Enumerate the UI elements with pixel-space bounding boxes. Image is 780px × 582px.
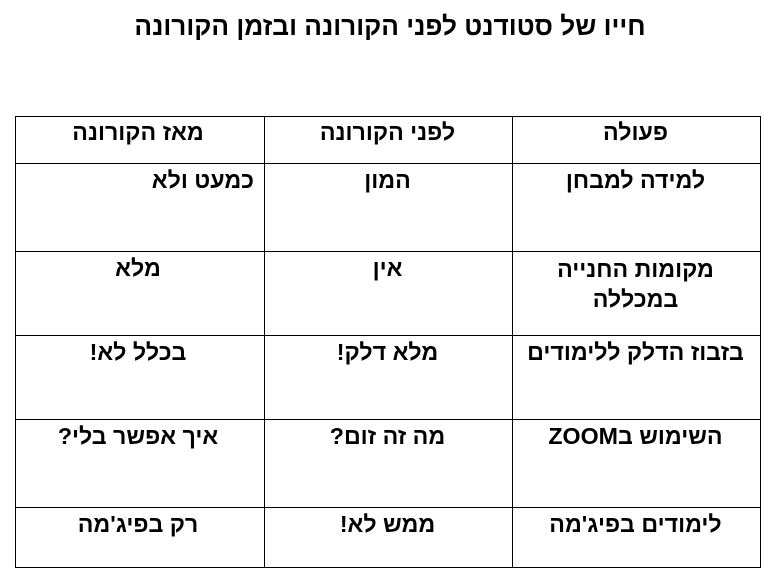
row 4 before: מה זה זום? — [330, 423, 445, 449]
row 3 action: בזבוז הדלק ללימודים — [527, 339, 744, 365]
title: חייו של סטודנט לפני הקורונה ובזמן הקורונה — [134, 11, 646, 41]
header: before corona: לפני הקורונה — [320, 119, 455, 145]
row 4 action: השימוש בZOOM — [548, 423, 723, 449]
row 2 action: במכללה — [593, 286, 678, 312]
row 4 since: איך אפשר בלי? — [58, 423, 218, 449]
row 5 before: ממש לא! — [340, 511, 435, 537]
row 1 before: המון — [364, 167, 411, 193]
row 5 action: לימודים בפיג'מה — [549, 511, 722, 537]
row 2 action — [557, 256, 714, 312]
row 3 before: מלא דלק! — [337, 339, 438, 365]
row 2 action: מקומות החנייה — [557, 256, 714, 282]
header: action: פעולה — [603, 119, 668, 145]
row 5 since: רק בפיג'מה — [78, 511, 198, 537]
comparison table — [15, 116, 761, 568]
header: since corona: מאז הקורונה — [72, 119, 204, 145]
row 1 action: למידה למבחן — [566, 167, 705, 193]
row 3 since: בכלל לא! — [90, 339, 186, 365]
row 1 since: כמעט ולא — [152, 167, 254, 193]
row 2 before: אין — [373, 255, 402, 281]
row 2 since: מלא — [115, 255, 161, 281]
